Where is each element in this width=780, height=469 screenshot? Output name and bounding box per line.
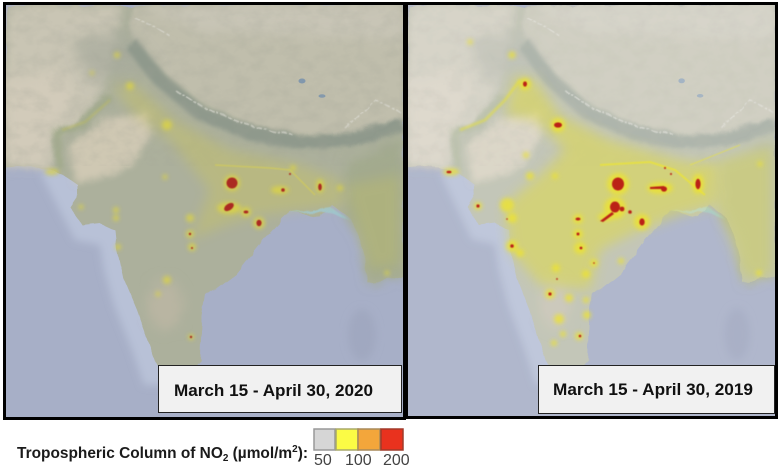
- yellow hotspots 2019: [443, 40, 762, 346]
- legend title: Tropospheric Column of NO: [17, 445, 224, 462]
- NO2 haze 2020: [62, 85, 400, 270]
- overall lightening veil: [408, 5, 775, 416]
- red hotspots 2019: [446, 81, 701, 337]
- legend title: (µmol/m: [228, 445, 292, 462]
- date label 2019: [538, 366, 774, 414]
- land lightening veil: [408, 5, 775, 371]
- legend swatches: [314, 429, 403, 450]
- date label 2019: March 15 - April 30, 2019: [553, 380, 753, 399]
- legend title: 2: [223, 453, 229, 464]
- date label 2020: March 15 - April 30, 2020: [174, 381, 373, 400]
- base map 2020: [6, 5, 403, 417]
- legend scale labels: 50: [314, 452, 332, 469]
- panel: 2019 map: [406, 4, 776, 418]
- NO2 haze 2019: [460, 75, 773, 290]
- legend: [17, 429, 410, 469]
- panel: 2020 map: [4, 4, 404, 418]
- red hotspots 2020: [189, 173, 322, 338]
- legend scale labels: [314, 452, 410, 469]
- legend title: 2: [292, 444, 298, 455]
- legend title: ):: [298, 445, 308, 462]
- legend scale labels: 100: [345, 452, 372, 469]
- date label 2020: [158, 366, 402, 412]
- base map 2019: [408, 5, 775, 416]
- yellow hotspots 2020: [45, 52, 390, 340]
- legend scale labels: 200: [383, 452, 410, 469]
